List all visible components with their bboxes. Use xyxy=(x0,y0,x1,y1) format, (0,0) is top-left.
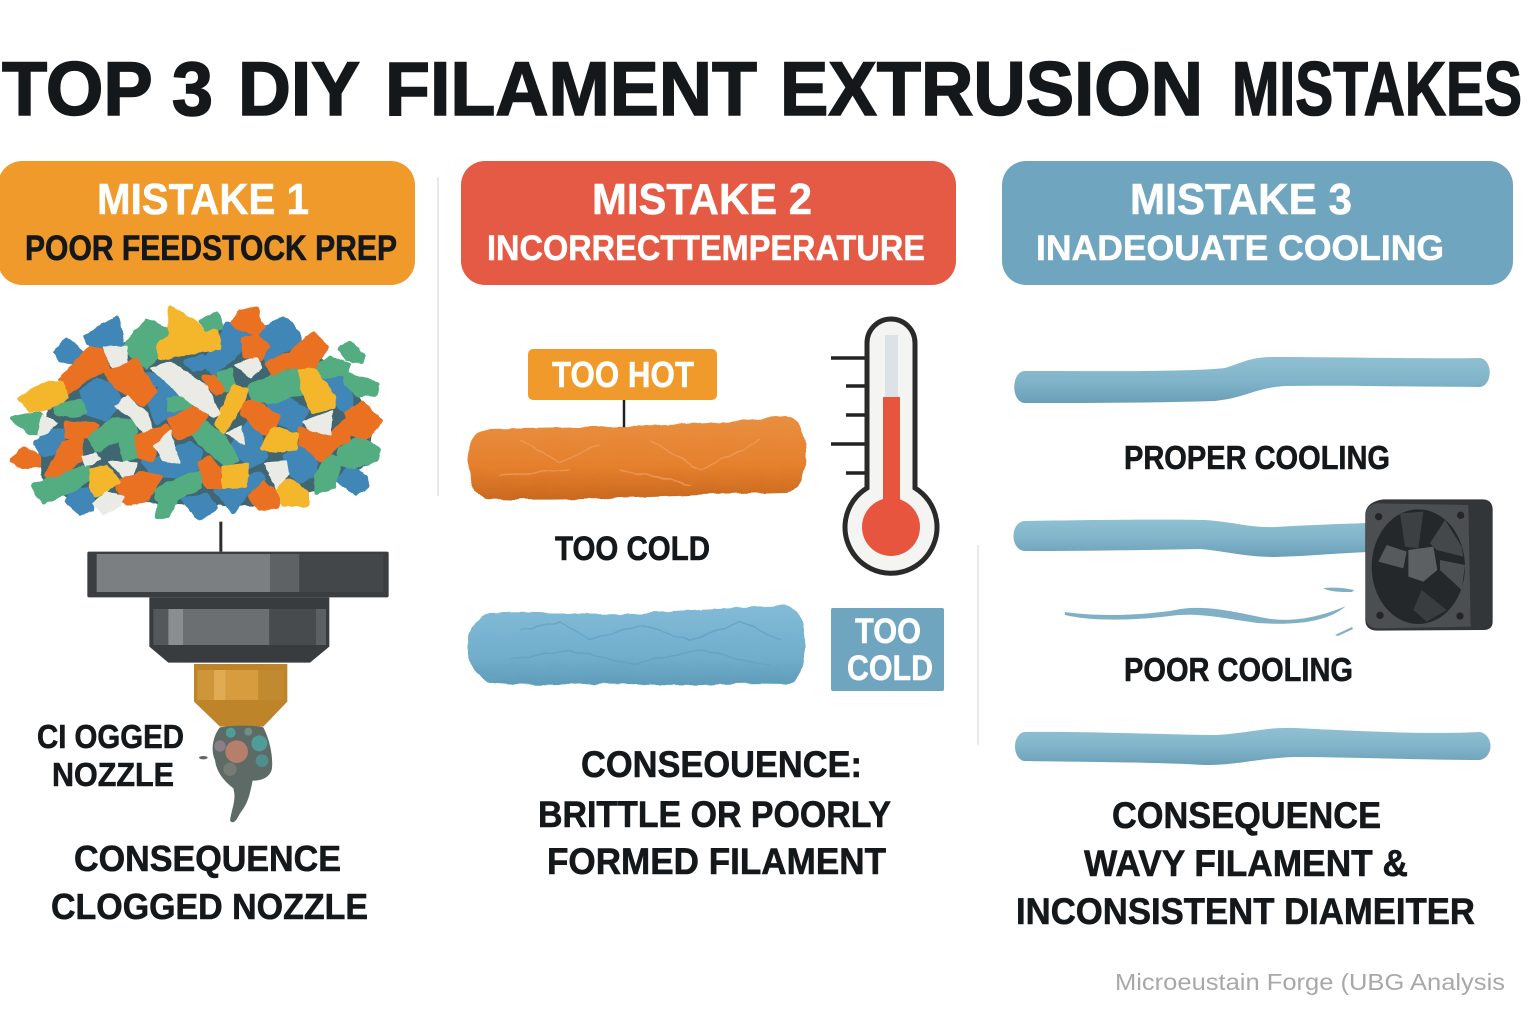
text block: consequence wavy filament: INCONSISTENT DIAMEITER xyxy=(1016,891,1475,932)
text block: consequence wavy filament xyxy=(1016,795,1475,932)
illustration: poor cooling filament xyxy=(1014,520,1368,557)
label: proper cooling: PROPER COOLING xyxy=(1124,439,1390,476)
label: clogged nozzle xyxy=(37,718,184,793)
text block: consequence brittle filament: BRITTLE OR POORLY xyxy=(538,794,891,835)
label: clogged nozzle: NOZZLE xyxy=(52,756,174,793)
text block: consequence clogged nozzle: CLOGGED NOZZLE xyxy=(51,886,368,927)
illustration: orange overheated filament xyxy=(468,416,806,500)
text block: consequence brittle filament xyxy=(538,744,891,882)
subheading: inadequate cooling: INADEOUATE COOLING xyxy=(1036,229,1444,268)
illustration: blue underheated filament xyxy=(468,605,805,685)
title: DIY xyxy=(238,47,360,132)
illustration: thermometer xyxy=(831,319,937,573)
source note: Microeustain Forge (UBG Analysis xyxy=(1115,969,1505,995)
text block: consequence brittle filament: CONSEOUENCE: xyxy=(581,744,862,785)
panel: mistake 3 header xyxy=(1002,161,1513,285)
title xyxy=(2,47,1522,132)
callout: too cold xyxy=(831,608,944,691)
heading: mistake 3: MISTAKE 3 xyxy=(1130,175,1352,224)
title: EXTRUSION xyxy=(780,47,1203,132)
callout: too hot: TOO HOT xyxy=(552,354,694,395)
callout: too cold: TOO xyxy=(855,612,921,651)
text block: consequence wavy filament: CONSEQUENCE xyxy=(1112,795,1381,836)
heading: mistake 2: MISTAKE 2 xyxy=(592,175,812,224)
text block: consequence wavy filament: WAVY FILAMENT & xyxy=(1084,843,1408,884)
label: poor cooling: POOR COOLING xyxy=(1124,651,1353,688)
illustration: pile of coloured plastic chips xyxy=(12,308,380,518)
text block: consequence brittle filament: FORMED FILAMENT xyxy=(547,841,886,882)
text block: consequence clogged nozzle: CONSEQUENCE xyxy=(74,838,341,879)
heading: mistake 1: MISTAKE 1 xyxy=(97,175,309,224)
callout: too cold: COLD xyxy=(847,649,933,688)
text block: consequence clogged nozzle xyxy=(51,838,368,927)
illustration: wavy air lines xyxy=(1065,588,1354,636)
illustration: proper cooling filament xyxy=(1014,357,1490,403)
illustration: wavy filament xyxy=(1015,728,1490,765)
label: clogged nozzle: CI OGGED xyxy=(37,718,184,755)
title: FILAMENT xyxy=(385,47,757,132)
title: TOP 3 xyxy=(2,47,213,132)
illustration: fan xyxy=(1365,499,1493,631)
subheading: incorrect temperature: INCORRECTTEMPERATURE xyxy=(487,229,925,268)
illustration: extruder with clogged nozzle xyxy=(87,522,389,822)
callout: too hot xyxy=(528,349,717,428)
panel: mistake 1 header xyxy=(0,161,415,285)
label: too cold: TOO COLD xyxy=(555,530,710,568)
panel: mistake 2 header xyxy=(461,161,956,285)
subheading: poor feedstock prep: POOR FEEDSTOCK PREP xyxy=(25,229,397,268)
